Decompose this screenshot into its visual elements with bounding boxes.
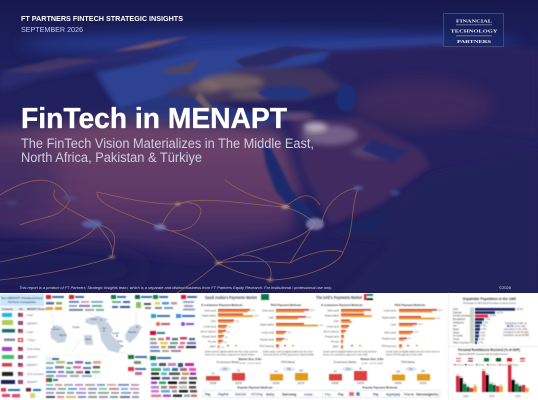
bar chart: Saudi e-commerce payment methods: 6% (225, 337, 228, 339)
bar chart: remittances 2022: 7% (519, 384, 522, 386)
bar chart: Saudi e-commerce payment methods: Sell on delivery (200, 330, 217, 334)
bar chart: Saudi POS payment methods: 8% (285, 339, 288, 341)
bar chart: Saudi e-commerce payment methods: 35% (254, 316, 258, 318)
bar chart: Saudi market size: 167 (274, 370, 279, 374)
text: UAE chart takeaways: forms of POS payment in the UAE (386, 354, 423, 356)
bar chart: UAE e-commerce payment methods: Sell on delivery (323, 330, 340, 334)
bar chart: Saudi e-commerce payment methods: 2% (221, 347, 224, 349)
panel: non-MENAPT headquartered companies: FinTech Companies (8, 300, 36, 304)
disclaimer: ©2026 (499, 286, 511, 290)
bar chart: UAE e-commerce payment methods: E-commerce Payment Methods (321, 303, 363, 307)
legend: remittance countries: Egypt (513, 364, 519, 366)
bar chart: UAE market size: 2027E (420, 382, 427, 385)
panel: non-MENAPT headquartered companies: MENAPT (27, 322, 38, 326)
bar chart: Saudi market size: 2023E - 2027E CAGR (239, 362, 261, 365)
bar chart: expat population by country: Pakistan (453, 311, 463, 314)
panel: Israel logos (45, 356, 107, 378)
panel: The UAE's Payments Market (316, 294, 442, 398)
bar chart: Saudi market size: 32 (237, 370, 240, 372)
callout: expatriate share: compared to the Emirati (503, 331, 529, 334)
panel: non-MENAPT headquartered companies: Non-MENAPT Headquartered (1, 296, 43, 300)
panel: personal remittances received (449, 346, 538, 398)
preview strip: all page previews softened together (0, 293, 538, 400)
bar chart: remittances 2022 (508, 363, 529, 398)
bar chart: Saudi market size: E-commerce Market (217, 361, 240, 364)
bar chart: Saudi e-commerce payment methods: Pre-pay (208, 340, 217, 344)
title: FinTech in MENAPT (21, 103, 287, 135)
bar chart: expat population by country (453, 308, 523, 344)
bar chart: UAE e-commerce payment methods: Pre-pay (331, 340, 340, 344)
bar chart: Saudi market size: POS Market (281, 361, 295, 364)
report series heading: SEPTEMBER 2026 (21, 25, 83, 34)
bar chart: expat population by country: Egypt (453, 328, 459, 331)
bar chart: Saudi e-commerce payment methods: Debit cards (204, 310, 217, 312)
map: MENAPT region (50, 316, 142, 353)
subtitle (21, 136, 314, 165)
hero background: satellite view of Europe, Middle East and Africa (0, 0, 538, 294)
text: Saudi chart takeaways: Debit cards, cash & digital wallets are the most (263, 350, 313, 354)
bar chart: UAE e-commerce payment methods: Credit cards (327, 326, 340, 328)
heading: Saudi payments market: Saudi Arabia's Payments Market (205, 295, 257, 300)
map: country labels and connector lines (51, 312, 150, 380)
bar chart: Saudi e-commerce payment methods: Digital wallets (202, 314, 217, 318)
bar chart: expat population by country: 2.1% (479, 339, 484, 341)
logos: UAE popular payment methods: tabby (430, 392, 439, 396)
panel: non-MENAPT headquartered companies: Company (2, 308, 14, 311)
bar chart: expat population by country: Philippines (453, 322, 465, 324)
bar chart: Saudi market size: Market Size, $ Bn (238, 357, 262, 361)
logos: UAE popular payment methods: Pay (338, 392, 344, 396)
disclaimer: This report is a product of FT Partners' Strategic Insights team, which is a separate and distinct business from FT Partners Equity Research. For institutional / professional use only. (19, 286, 332, 290)
text: Saudi chart takeaways (205, 350, 314, 356)
heading: personal remittances: Selected MENAPT Countries with the Highest Amount (458, 352, 508, 356)
logos: UAE popular payment methods (323, 386, 440, 398)
panel: Lebanon and Qatar company logos (1, 388, 41, 398)
bar chart: Saudi e-commerce payment methods: 16% (235, 321, 239, 323)
bar chart: remittances 2020: 8% (467, 385, 470, 387)
bar chart: expat population by country: 7.4% (485, 319, 490, 321)
bar chart: UAE POS payment methods: 36% (436, 318, 440, 320)
bar chart: UAE POS payment methods: Digital wallets (382, 316, 397, 320)
callout: expatriate share: population in the UAE, (504, 328, 528, 331)
panel: non-MENAPT headquartered companies: HQ (19, 308, 23, 311)
panel: Saudi Arabia logos (150, 356, 198, 399)
bar chart: Saudi market size: 8% (287, 368, 292, 371)
bar chart: UAE POS payment methods: Debit cards (384, 332, 397, 334)
bar chart: Saudi e-commerce payment methods: 8% (227, 332, 230, 334)
logos: Saudi popular payment methods: Pay (205, 392, 211, 396)
bar chart: remittances 2020: 6% (474, 384, 477, 386)
map: country labels and connector lines: Qatar (117, 340, 123, 343)
legend: remittance countries: Lebanon (456, 364, 465, 366)
panel: non-MENAPT headquartered companies: North Africa (27, 348, 41, 351)
bar chart: Saudi POS payment methods: POS Payment Methods (271, 303, 302, 307)
heading: expatriate population (463, 297, 517, 305)
bar chart: Saudi POS payment methods: 33% (310, 310, 314, 312)
map: country labels and connector lines: Kuwait (112, 332, 119, 335)
bar chart: remittances 2021: 24% (482, 369, 486, 371)
logos: Saudi popular payment methods: PayPal (218, 392, 229, 396)
panel: non-MENAPT headquartered companies: MENAPT (27, 381, 38, 384)
map: country labels and connector lines: Egypt (85, 338, 91, 341)
bar chart: remittances 2022: 27% (508, 363, 512, 365)
bar chart: Saudi market size: 15% (223, 368, 228, 371)
bar chart: Saudi POS payment methods: Prepaid cards (260, 338, 275, 342)
bar chart: expat population by country: 3.2% (480, 336, 485, 338)
bar chart: UAE POS payment methods (381, 303, 442, 348)
logos: Saudi popular payment methods: tabby (266, 392, 275, 396)
bar chart: expat population by country: 16.7% (496, 312, 503, 314)
bar chart: expat population by country: 1.7% (478, 342, 483, 344)
bar chart: Saudi POS payment methods: 30% (307, 317, 311, 319)
bar chart: expat population by country: 4.3% (481, 326, 486, 328)
legend: remittance countries: Jordan (478, 364, 485, 366)
bar chart: expat population by country: China (453, 339, 460, 341)
map: country labels and connector lines: Tunisia (72, 327, 80, 329)
bar chart: UAE market size (329, 357, 430, 385)
bar chart: UAE POS payment methods: Cash (391, 324, 397, 326)
bar chart: expat population by country: India (453, 309, 459, 311)
logos: UAE popular payment methods: Pay (325, 392, 331, 396)
logos: Saudi popular payment methods: SADAD (235, 392, 247, 396)
bar chart: Saudi e-commerce payment methods: 5% (224, 342, 227, 344)
bar chart: expat population by country: Iran (453, 325, 458, 328)
logos: Saudi popular payment methods (203, 386, 334, 398)
bar chart: expat population by country: 4.2% (481, 329, 486, 331)
bar chart: Saudi e-commerce payment methods: BNPL (210, 346, 217, 348)
subtitle: North Africa, Pakistan & Türkiye (21, 150, 202, 165)
bar chart: Saudi market size: 2027E (298, 382, 305, 385)
bar chart: Saudi market size: 226 (299, 370, 304, 372)
bar chart: Saudi POS payment methods: 10% (287, 332, 291, 334)
bar chart: UAE market size: 12% (346, 368, 351, 371)
legend: remittance countries: Morocco (501, 364, 510, 366)
map: country labels and connector lines: Iraq (102, 327, 107, 330)
FT Partners logo box (444, 14, 504, 46)
bar chart: UAE POS payment methods: POS Payment Methods (395, 303, 426, 307)
bar chart: UAE market size: 2023E (395, 382, 402, 385)
hero: city light routes across Africa and Arabia (0, 180, 358, 294)
report series heading (21, 14, 183, 34)
bar chart: Saudi e-commerce payment methods: Prepaid cards (202, 336, 217, 338)
logos: Saudi popular payment methods: STCPay (251, 392, 263, 396)
logos: Saudi popular payment methods: Popular Payment Methods (237, 386, 273, 390)
bar chart: expat population by country: Emirati population (453, 315, 472, 318)
panel: Egypt logos (150, 331, 196, 352)
bar chart: UAE e-commerce payment methods: BNPL (333, 346, 340, 348)
text: Saudi chart takeaways: forms of e-commerce payment in Saudi Arabia (205, 354, 255, 356)
bar chart: Saudi POS payment methods (259, 303, 323, 348)
bar chart: UAE e-commerce payment methods (321, 303, 372, 349)
panel: UAE logos (46, 378, 139, 398)
bar chart: Saudi market size: 19 (212, 372, 215, 376)
text: UAE chart takeaways: Credit cards & digital wallets are the most common (386, 350, 440, 354)
subtitle: The FinTech Vision Materializes in The Middle East, (21, 136, 314, 151)
bar chart: UAE market size: 6% (409, 368, 414, 371)
bar chart: UAE e-commerce payment methods: Debit cards (327, 310, 340, 312)
preview strip background (0, 293, 538, 400)
bar chart: Saudi e-commerce payment methods: 32% (251, 310, 255, 312)
bar chart: Saudi POS payment methods: 42% (319, 325, 323, 327)
heading: expatriate population: Percentage of UAE's Expat Population by Home Country (463, 301, 517, 305)
panel: non-MENAPT headquartered companies: GCC Countries (27, 373, 45, 376)
bar chart: Saudi POS payment methods: Credit cards (262, 332, 275, 334)
legend: remittance countries: Yemen (467, 364, 474, 366)
bar chart: remittances 2022: 9% (516, 382, 519, 384)
heading: UAE payments market: The UAE's Payments Market (316, 295, 362, 300)
bar chart: expat population by country: 38.2% (516, 309, 523, 311)
bar chart: remittances 2022: 2022 (515, 395, 521, 398)
bar chart: UAE market size: 190 (421, 370, 426, 373)
bar chart: Saudi e-commerce payment methods (200, 303, 258, 349)
bar chart: remittances 2020 (456, 374, 477, 398)
bar chart: remittances 2021: 7% (500, 384, 503, 386)
heading: expatriate population: Expatriate Population in the UAE (463, 297, 516, 301)
bar chart: Saudi e-commerce payment methods: Credit cards (204, 326, 217, 328)
FT Partners logo box: TECHNOLOGY (450, 28, 498, 34)
report series heading: FT PARTNERS FINTECH STRATEGIC INSIGHTS (21, 14, 183, 23)
bar chart: UAE POS payment methods: 18% (418, 324, 422, 326)
bar chart: UAE e-commerce payment methods: Prepaid cards (325, 336, 340, 338)
bar chart: UAE POS payment methods: Prepaid cards (382, 338, 397, 340)
FT Partners logo box: FINANCIAL (456, 18, 492, 24)
bar chart: remittances 2021: 18% (485, 373, 489, 375)
bar chart: UAE market size: Market Size, $ Bn (360, 357, 384, 361)
bar chart: expat population by country: 3.2% (480, 332, 485, 334)
bar chart: Saudi e-commerce payment methods: Cash (211, 321, 217, 323)
bar chart: expat population by country: Other Countries (453, 341, 470, 344)
bar chart: Saudi POS payment methods: Cash (269, 318, 275, 320)
map: country labels and connector lines: Morocco (51, 328, 61, 331)
logos: UAE popular payment methods: Klarna (404, 392, 414, 396)
bar chart: Saudi POS payment methods: Debit cards (262, 310, 275, 312)
bar chart: Saudi e-commerce payment methods: E-commerce Payment Methods (201, 303, 243, 307)
callout: expatriate share: Expatriates make up (505, 322, 528, 325)
bar chart: UAE POS payment methods: POS financing (381, 346, 397, 348)
text: UAE chart takeaways: forms of e-commerce payment in the UAE (323, 354, 368, 356)
callout: expatriate share: population at just 11.5% (503, 334, 530, 337)
disclaimer (19, 286, 511, 290)
bar chart: remittances 2021: 2021 (489, 395, 495, 398)
bar chart: expat population by country: Bangladesh (453, 319, 466, 321)
bar chart: remittances 2020: 13% (459, 376, 463, 378)
bar chart: remittances 2021: 10% (489, 382, 493, 384)
bar chart: remittances 2020: 2020 (463, 395, 469, 398)
bar chart: UAE e-commerce payment methods: Cash (334, 321, 340, 323)
heading: personal remittances: Personal Remittances Received (% of GDP) (458, 348, 521, 352)
bar chart: Saudi market size: 2023E (210, 382, 217, 385)
bar chart: expat population by country: Sri Lanka (453, 335, 463, 338)
logos: Saudi popular payment methods: urpay (304, 392, 313, 396)
panel: Saudi Arabia's Payments Market (200, 294, 334, 398)
bar chart: Saudi market size (206, 357, 308, 385)
map: country labels and connector lines: Algeria (59, 334, 67, 337)
bar chart: remittances 2021: 9% (493, 383, 496, 385)
panel: non-MENAPT headquartered companies (0, 294, 49, 384)
map: country labels and connector lines: Turkey (90, 318, 98, 321)
legend: remittance countries: Pakistan (489, 364, 498, 366)
bar chart: UAE market size: E-commerce Market (334, 361, 357, 364)
panel: non-MENAPT headquartered companies: Israel (27, 331, 34, 334)
text: UAE chart takeaways (323, 350, 440, 356)
bar chart: remittances 2020: 9% (464, 382, 467, 384)
divider (448, 293, 449, 400)
panel: non-MENAPT headquartered companies: MENAPT Presence (27, 308, 49, 311)
text: UAE chart takeaways: Credit cards & digital wallets are the most common (323, 350, 377, 354)
text: Saudi chart takeaways: Debit cards & digital wallets are the most common (205, 350, 259, 354)
bar chart: UAE market size: 152 (396, 370, 401, 374)
bar chart: UAE POS payment methods: Credit cards (384, 310, 397, 312)
bar chart: UAE market size: 2027E (357, 382, 364, 385)
logos: UAE popular payment methods: Popular Payment Methods (362, 386, 398, 390)
bar chart: Saudi POS payment methods: POS financing (259, 346, 275, 348)
bar chart: remittances 2021 (482, 369, 503, 398)
map: country labels and connector lines: Pakistan (128, 331, 138, 334)
bar chart: expat population by country: Nepal (453, 332, 459, 334)
bar chart: UAE POS payment methods: 14% (414, 332, 418, 334)
bar chart: UAE market size: 2023E (332, 382, 339, 385)
bar chart: Saudi market size: 2023E (273, 382, 280, 385)
legend: remittance countries (454, 358, 525, 366)
bar chart: Saudi market size: 2027E (235, 382, 242, 385)
panel: non-MENAPT headquartered companies: MENAPT (27, 356, 38, 359)
bar chart: UAE e-commerce payment methods: Digital wallets (325, 314, 340, 318)
bar chart: UAE market size: POS Market (401, 361, 415, 364)
text: Saudi chart takeaways: common forms of POS payment in Saudi Arabia (263, 354, 314, 356)
FT Partners logo box: PARTNERS (457, 39, 492, 44)
panel: country logo cards along the top (46, 295, 197, 311)
panel: non-MENAPT headquartered companies: Türkiye (27, 339, 36, 342)
heading: personal remittances (458, 348, 521, 356)
callout: expatriate share (503, 322, 530, 337)
callout: expatriate share: 88.5% of the total (507, 325, 526, 328)
bar chart: UAE POS payment methods: 38% (438, 310, 442, 312)
panel: Palestine and Lebanon (128, 355, 147, 375)
hero: glowing city hubs (6, 186, 400, 282)
bar chart: expat population by country: 5.6% (483, 322, 488, 324)
bar chart: UAE POS payment methods: 8% (408, 338, 411, 340)
panel: Uzbekistan and Azerbaijan (151, 314, 195, 326)
logos: Saudi popular payment methods: Samsung (282, 392, 296, 396)
bar chart: expat population by country: 11.5% (490, 316, 496, 318)
bar chart: UAE market size: 29 (334, 370, 337, 374)
panel: non-MENAPT headquartered companies: Israel (27, 314, 34, 317)
bar chart: remittances 2022: 13% (511, 378, 515, 380)
bar chart: Saudi e-commerce payment methods: 9% (228, 326, 231, 328)
bar chart: UAE market size: 46 (359, 368, 362, 370)
logos: UAE popular payment methods: Samsung (416, 392, 430, 396)
logos: UAE popular payment methods: Pay (373, 392, 379, 396)
bar chart: remittances 2020: 17% (456, 374, 460, 376)
panel: expatriate population in the UAE (448, 293, 530, 400)
panel: non-MENAPT headquartered companies: MENAPT (27, 364, 38, 367)
bar chart: Saudi POS payment methods: Digital wallets (260, 324, 275, 326)
bar chart: UAE market size: 2023E - 2027E CAGR (361, 362, 383, 365)
logos: UAE popular payment methods: Applepay (386, 392, 401, 396)
